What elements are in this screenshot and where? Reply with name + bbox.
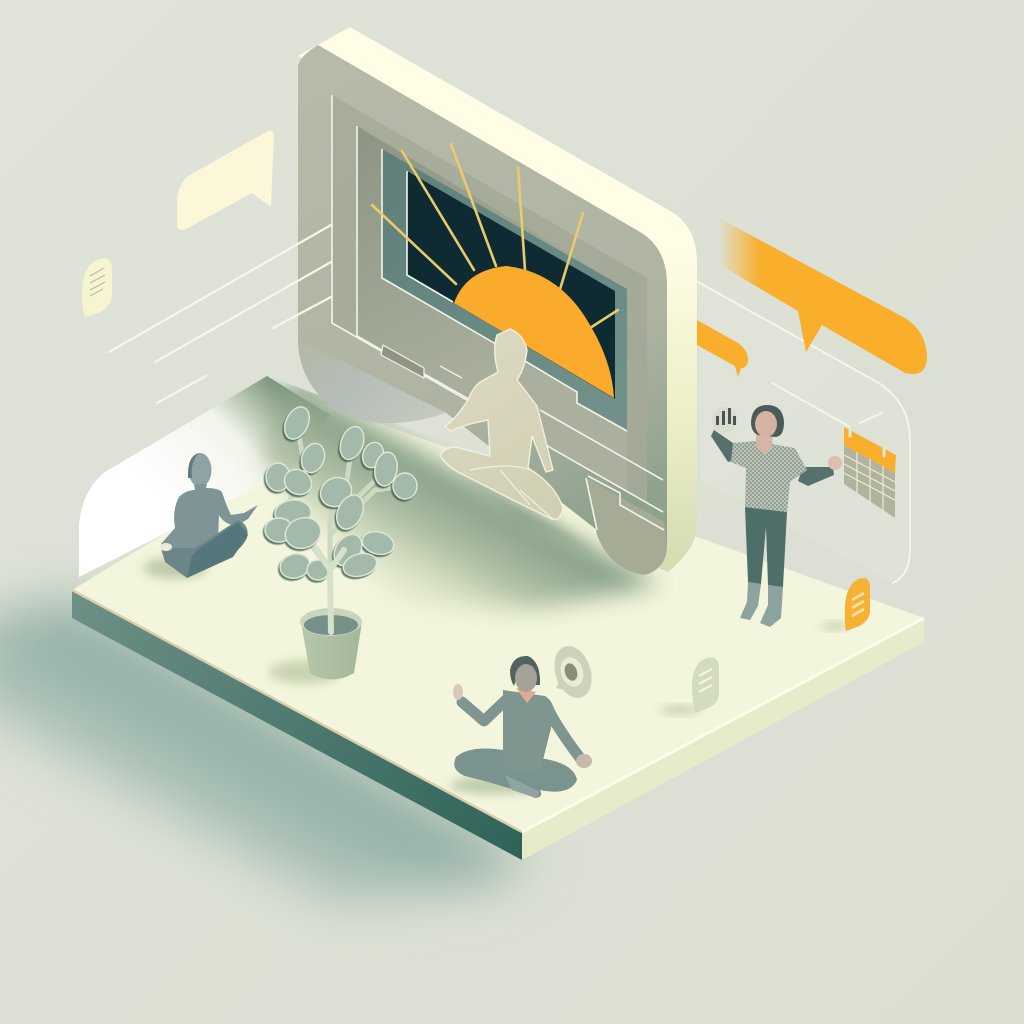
inner teal frame [382, 149, 627, 431]
arms [711, 430, 736, 462]
chip shadow [660, 706, 700, 714]
monitor chin [298, 342, 445, 423]
leaves [265, 403, 417, 581]
monitor bottom right pocket [586, 478, 667, 575]
plant [265, 403, 417, 684]
raised hand with globe [712, 407, 738, 433]
floor shadow from monitor [262, 380, 660, 610]
middle frame [357, 126, 627, 490]
chip shadow [821, 622, 849, 630]
calendar rings [850, 428, 884, 456]
neck [756, 432, 773, 455]
platform bevel [72, 590, 522, 832]
monitor slot [381, 345, 424, 378]
platform top surface [72, 395, 924, 832]
frame lines [332, 95, 664, 530]
dark screen [407, 171, 615, 399]
speech bubble: cream [177, 131, 274, 230]
orange chat chip [821, 578, 870, 631]
small green chat chip [660, 657, 719, 714]
person silhouette [440, 329, 563, 520]
hands [453, 684, 463, 700]
outer frame [332, 95, 647, 503]
platform [72, 395, 924, 860]
head [188, 453, 212, 487]
sun [454, 266, 614, 398]
bottom meditating person [450, 656, 592, 798]
torso and arms [161, 484, 258, 555]
floor figure: central meditating person [440, 329, 600, 555]
back wall [79, 376, 330, 577]
neck [516, 688, 536, 703]
pointing hand [828, 456, 842, 470]
speech bubble: large orange [717, 217, 927, 374]
hair [751, 405, 784, 437]
legs [161, 520, 248, 578]
left meditating person [143, 453, 258, 579]
motion lines [109, 225, 331, 403]
shadow [450, 776, 540, 794]
arms [462, 698, 508, 721]
monitor face [298, 45, 667, 575]
face [755, 411, 777, 437]
platform front left side [72, 590, 522, 860]
pot [301, 622, 362, 680]
monitor cream side [298, 27, 697, 572]
shadow [143, 557, 207, 579]
trousers [745, 507, 787, 587]
right standing person [711, 405, 842, 627]
monitor [298, 27, 697, 575]
platform front right side [522, 618, 924, 860]
person leg folds [470, 466, 553, 519]
foot [505, 775, 540, 798]
face [515, 664, 537, 692]
small cream chat chip [82, 258, 112, 317]
glass panel on the right [698, 282, 910, 583]
sun rays [372, 144, 618, 328]
small orange bubble [697, 320, 748, 377]
legs [454, 749, 577, 798]
person shadow [455, 470, 600, 555]
torso [503, 690, 555, 771]
shirt [731, 441, 807, 512]
stem [290, 430, 405, 630]
calendar [844, 427, 896, 518]
hair [510, 656, 540, 686]
ground shadow [0, 600, 530, 905]
boots [740, 582, 761, 620]
speech bubble with icon [548, 641, 598, 703]
hand [160, 543, 172, 551]
pot shadow [269, 660, 341, 684]
foreground stem [316, 548, 344, 632]
